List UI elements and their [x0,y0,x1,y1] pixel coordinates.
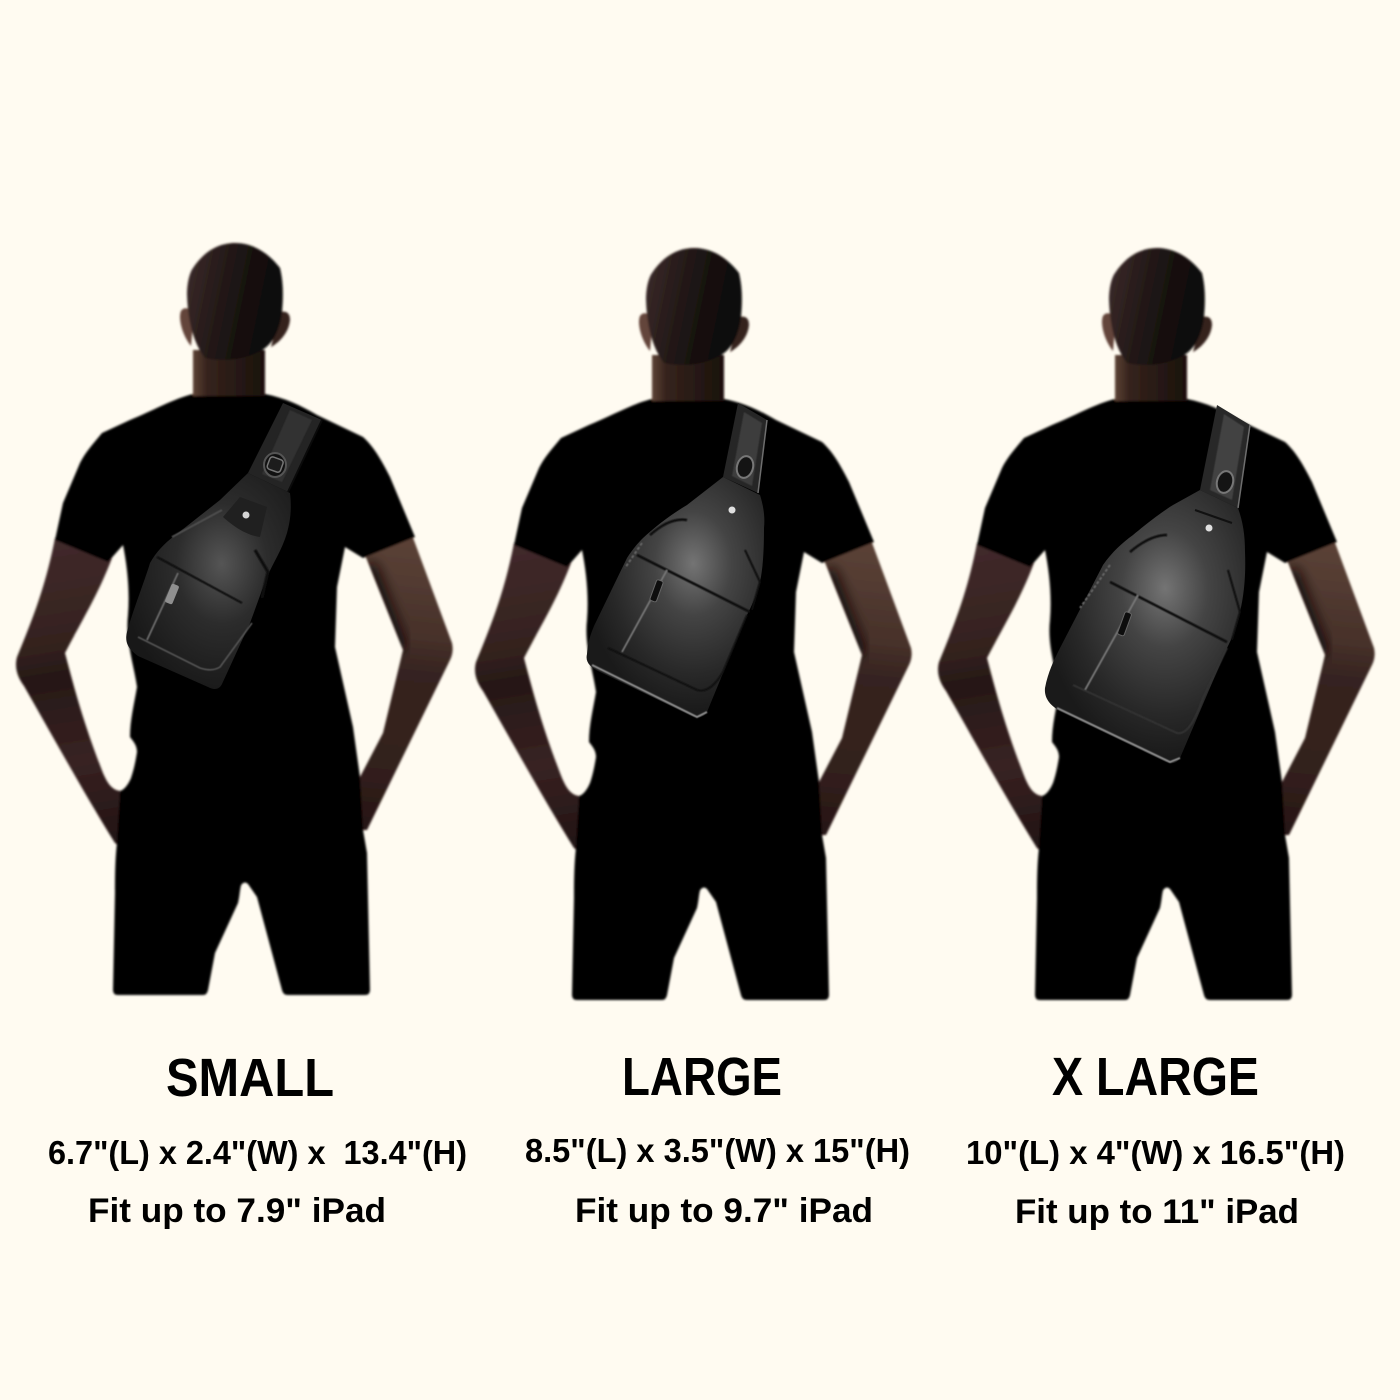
bag: x large sling [1045,405,1250,763]
strap [723,403,767,493]
strap [1200,405,1250,508]
flap with snap button [223,497,267,537]
size block: large [525,1047,910,1230]
dimensions: x large: 10"(L) x 4"(W) x 16.5"(H) [966,1134,1345,1171]
fit note: small: Fit up to 7.9" iPad [88,1192,386,1230]
seams and pocket [138,510,268,670]
fit note: x large: Fit up to 11" iPad [1015,1193,1299,1231]
size block: x large [966,1047,1345,1231]
figure: large bag model [475,248,912,1000]
D-ring [264,453,286,477]
zipper pull [165,583,179,605]
snap button [728,506,736,514]
bag: small sling [126,403,322,689]
heading: LARGE: LARGE [622,1047,782,1107]
strap [248,403,322,492]
seams and pocket [592,520,760,717]
bag body [1045,490,1245,763]
heading: X LARGE: X LARGE [1052,1047,1259,1107]
fit note: large: Fit up to 9.7" iPad [575,1192,873,1230]
D-ring [734,454,756,480]
figure: x large bag model [938,248,1375,1000]
silhouette: man from behind, large [475,248,912,1000]
figure: small bag model [16,243,453,995]
zipper pull [649,579,664,602]
size block: small [48,1048,467,1230]
heading: SMALL: SMALL [166,1048,334,1108]
bag: large sling [587,403,767,717]
seams and pocket [1057,535,1240,762]
flap outline [1195,510,1232,523]
silhouette: man from behind, x large [938,248,1375,1000]
dimensions: small: 6.7"(L) x 2.4"(W) x 13.4"(H) [48,1134,467,1171]
zipper pull [1117,611,1132,636]
D-ring [1214,469,1236,495]
bag body [126,473,291,689]
silhouette: man from behind, small [16,243,453,995]
dimensions: large: 8.5"(L) x 3.5"(W) x 15"(H) [525,1132,910,1169]
bag body [587,477,764,717]
snap button [1206,524,1212,532]
